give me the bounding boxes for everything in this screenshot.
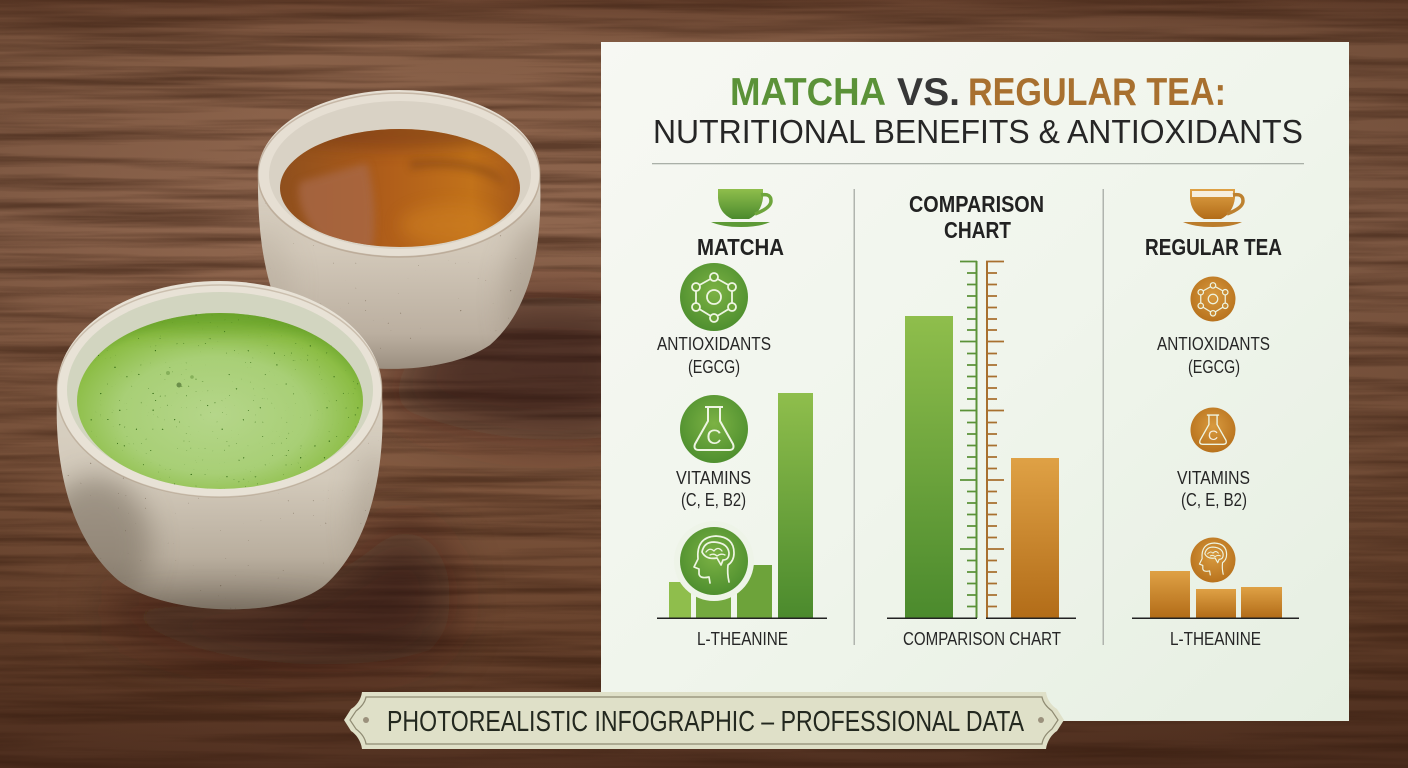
column: regular tea <box>1132 189 1299 649</box>
label: vitamins: VITAMINS <box>676 468 751 488</box>
matcha surface <box>77 313 363 489</box>
icon: vitamins: C <box>706 426 722 449</box>
table shadows beneath bowls <box>110 297 640 664</box>
panel: infographic card <box>601 42 1349 721</box>
heading: comparison chart <box>909 191 1044 243</box>
label: vitamins <box>1177 468 1250 510</box>
heading: regular tea: REGULAR TEA <box>1145 234 1282 260</box>
label: antioxidants <box>1157 334 1270 377</box>
title: VS. <box>897 71 960 114</box>
bowl body <box>57 346 383 609</box>
label: vitamins: (C, E, B2) <box>1181 490 1247 510</box>
heading: matcha: MATCHA <box>697 234 784 260</box>
title <box>653 71 1303 151</box>
label: vitamins: VITAMINS <box>1177 468 1250 488</box>
icon: antioxidants <box>1190 276 1236 322</box>
scale: regular tea <box>986 261 1004 618</box>
icon: vitamins: C <box>1208 427 1218 443</box>
photo: regular tea bowl <box>257 90 541 369</box>
bar chart: regular tea <box>1132 571 1299 619</box>
tea surface <box>280 129 520 247</box>
icon: tea cup <box>1183 189 1243 227</box>
title: MATCHA <box>730 71 886 114</box>
banner plaque <box>344 692 1064 749</box>
bar: matcha <box>905 316 953 618</box>
bowl rim <box>258 90 540 256</box>
column: matcha <box>657 189 827 649</box>
label: comparison chart: COMPARISON CHART <box>903 629 1061 649</box>
icon: antioxidants <box>680 263 748 331</box>
icon: l-theanine <box>1190 538 1236 582</box>
heading: comparison chart: CHART <box>944 217 1012 243</box>
label: l-theanine: L-THEANINE <box>1170 629 1261 649</box>
icon: matcha cup <box>711 189 771 227</box>
scale: matcha <box>960 261 977 618</box>
heading: comparison chart: COMPARISON <box>909 191 1044 217</box>
label: antioxidants <box>657 334 771 377</box>
title: REGULAR TEA: <box>968 71 1226 114</box>
icon: vitamins <box>1190 408 1236 452</box>
bar: regular tea <box>1011 458 1059 618</box>
banner text: PHOTOREALISTIC INFOGRAPHIC – PROFESSIONAL DATA <box>387 706 1024 738</box>
bowl body <box>258 134 540 369</box>
bowl rim <box>57 281 382 497</box>
label: antioxidants: (EGCG) <box>688 357 740 377</box>
photo: matcha bowl <box>56 281 383 610</box>
label: antioxidants: ANTIOXIDANTS <box>1157 334 1270 354</box>
label: l-theanine: L-THEANINE <box>697 629 788 649</box>
icon: l-theanine <box>674 521 754 601</box>
icon: vitamins <box>680 395 748 463</box>
label: antioxidants: ANTIOXIDANTS <box>657 334 771 354</box>
label: vitamins <box>676 468 751 510</box>
bar chart: matcha <box>657 393 827 619</box>
title: NUTRITIONAL BENEFITS & ANTIOXIDANTS <box>653 114 1303 151</box>
column: comparison chart <box>887 191 1076 649</box>
label: vitamins: (C, E, B2) <box>681 490 746 510</box>
label: antioxidants: (EGCG) <box>1188 357 1240 377</box>
